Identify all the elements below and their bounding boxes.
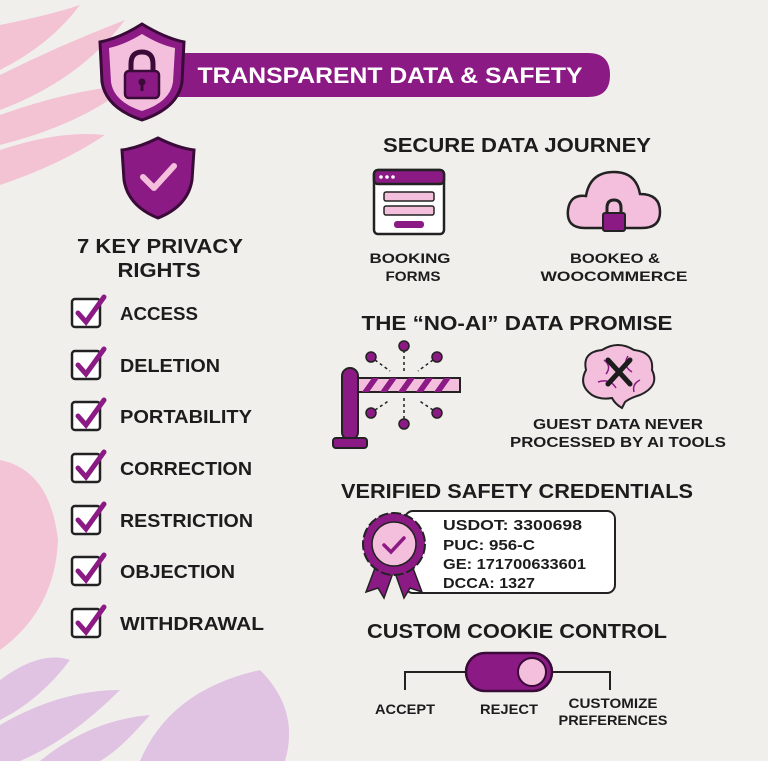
- rights checklist: WITHDRAWAL: [120, 614, 264, 634]
- icon: cloud lock: [568, 172, 660, 231]
- label: bookeo & woocommerce: WOOCOMMERCE: [540, 268, 688, 284]
- rights checklist: RESTRICTION: [120, 511, 253, 531]
- label: bookeo & woocommerce: BOOKEO &: [570, 250, 660, 266]
- heading: custom cookie control: CUSTOM COOKIE CONTROL: [367, 621, 667, 643]
- header banner: TRANSPARENT DATA & SAFETY: [198, 63, 583, 88]
- icon: gate barrier: [333, 341, 460, 448]
- heading: 7 key privacy rights: [77, 236, 244, 282]
- label: booking forms: BOOKING: [370, 250, 451, 266]
- heading: verified safety credentials: VERIFIED SAFETY CREDENTIALS: [341, 481, 693, 503]
- cookie toggle: CUSTOMIZE: [568, 695, 658, 711]
- cookie toggle: [375, 653, 668, 728]
- heading: no-ai promise: THE “NO-AI” DATA PROMISE: [362, 313, 672, 335]
- credentials box: [405, 511, 615, 593]
- label: guest data never processed: GUEST DATA NEVER: [533, 417, 704, 433]
- icon: check shield: [122, 138, 194, 218]
- label: booking forms: [370, 250, 451, 284]
- label: bookeo & woocommerce: [540, 250, 688, 284]
- rights checklist: [72, 297, 264, 637]
- heading: secure data journey: SECURE DATA JOURNEY: [383, 135, 652, 157]
- label: guest data never processed: PROCESSED BY AI TOOLS: [510, 435, 726, 451]
- rights checklist: PORTABILITY: [120, 407, 252, 427]
- cookie toggle: REJECT: [480, 701, 538, 717]
- credentials box: DCCA: 1327: [443, 575, 535, 592]
- heading: 7 key privacy rights: RIGHTS: [118, 260, 200, 282]
- decorative leaves: [0, 5, 289, 761]
- icon: brain with x: [583, 345, 654, 408]
- header banner: [176, 53, 610, 97]
- cookie toggle: ACCEPT: [375, 701, 435, 717]
- credentials box: USDOT: 3300698: [443, 517, 582, 534]
- rights checklist: ACCESS: [120, 304, 198, 324]
- cookie toggle: PREFERENCES: [558, 712, 668, 728]
- label: booking forms: FORMS: [386, 268, 440, 284]
- rights checklist: OBJECTION: [120, 562, 235, 582]
- header: shield with lock: [100, 24, 184, 120]
- label: guest data never processed: [510, 417, 726, 451]
- rights checklist: CORRECTION: [120, 459, 252, 479]
- icon: booking form browser: [374, 170, 444, 234]
- rights checklist: DELETION: [120, 356, 220, 376]
- credentials box: PUC: 956-C: [443, 537, 535, 554]
- heading: 7 key privacy rights: 7 KEY PRIVACY: [77, 236, 244, 258]
- credentials box: GE: 171700633601: [443, 556, 586, 573]
- icon: award rosette: [363, 513, 425, 598]
